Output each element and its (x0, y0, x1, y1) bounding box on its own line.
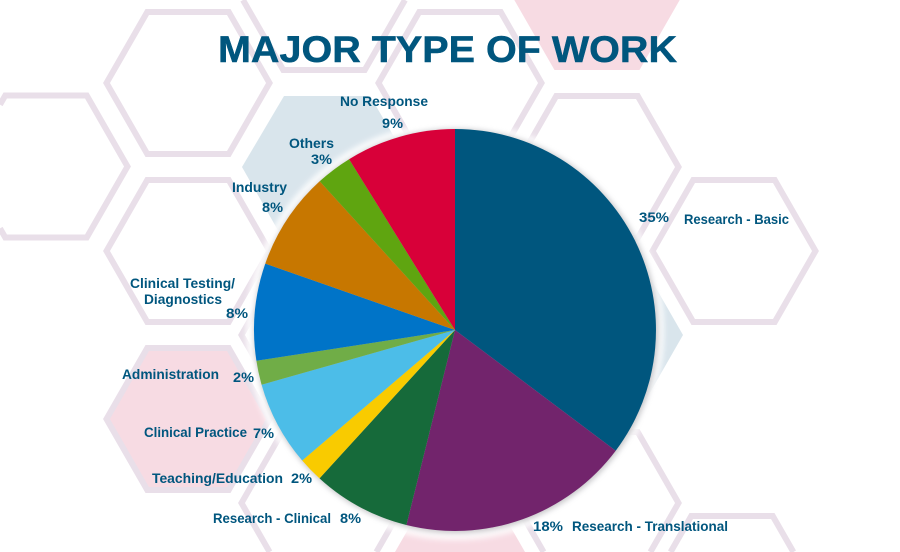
title: MAJOR TYPE OF WORK (218, 29, 677, 70)
label: Research - Translational 18%: 18% (533, 518, 564, 534)
slice: Clinical Testing/Diagnostics 8% (254, 264, 455, 361)
label: Research - Clinical 8%: 8% (340, 510, 362, 526)
label: Others 3%: 3% (311, 151, 333, 167)
label: Industry 8%: Industry (232, 179, 287, 195)
slice: Clinical Practice 7% (262, 330, 455, 460)
label: Clinical Testing/Diagnostics 8%: 8% (226, 305, 249, 321)
slice: Industry 8% (265, 181, 455, 330)
label: Administration 2%: 2% (233, 369, 255, 385)
label: Others 3%: Others (289, 135, 334, 151)
pie chart (246, 122, 664, 540)
slice: Administration 2% (256, 330, 455, 385)
slice: Research - Clinical 8% (320, 330, 455, 525)
label: Research - Clinical 8%: Research - Clinical (213, 510, 331, 526)
label: Research - Basic 35%: 35% (639, 209, 670, 225)
label: Research - Translational 18%: Research - Translational (572, 518, 728, 534)
label: Administration 2% (122, 366, 255, 385)
label: Clinical Testing/Diagnostics 8%: Clinical Testing/ (130, 275, 235, 291)
label: Administration 2%: Administration (122, 366, 219, 382)
slice: Others 3% (320, 159, 455, 330)
label: No Response 9%: 9% (382, 115, 404, 131)
slice: Research - Basic 35% (455, 129, 656, 451)
slice: Research - Translational 18% (406, 330, 616, 531)
label: Industry 8% (232, 179, 287, 215)
label: Clinical Practice 7%: 7% (253, 425, 275, 441)
label: Research - Basic 35%: Research - Basic (684, 211, 789, 227)
label: No Response 9% (340, 93, 428, 131)
slice: Teaching/Education 2% (302, 330, 455, 478)
label: Teaching/Education 2%: 2% (291, 470, 313, 486)
label: Clinical Testing/Diagnostics 8%: Diagnostics (144, 291, 222, 307)
label: No Response 9%: No Response (340, 93, 428, 109)
label: Clinical Practice 7%: Clinical Practice (144, 424, 247, 440)
label: Research - Basic 35% (639, 209, 789, 227)
slice: No Response 9% (349, 129, 455, 330)
label: Others 3% (289, 135, 334, 167)
label: Industry 8%: 8% (262, 199, 284, 215)
label: Teaching/Education 2%: Teaching/Education (152, 470, 283, 486)
label: Clinical Testing/Diagnostics 8% (130, 275, 249, 321)
